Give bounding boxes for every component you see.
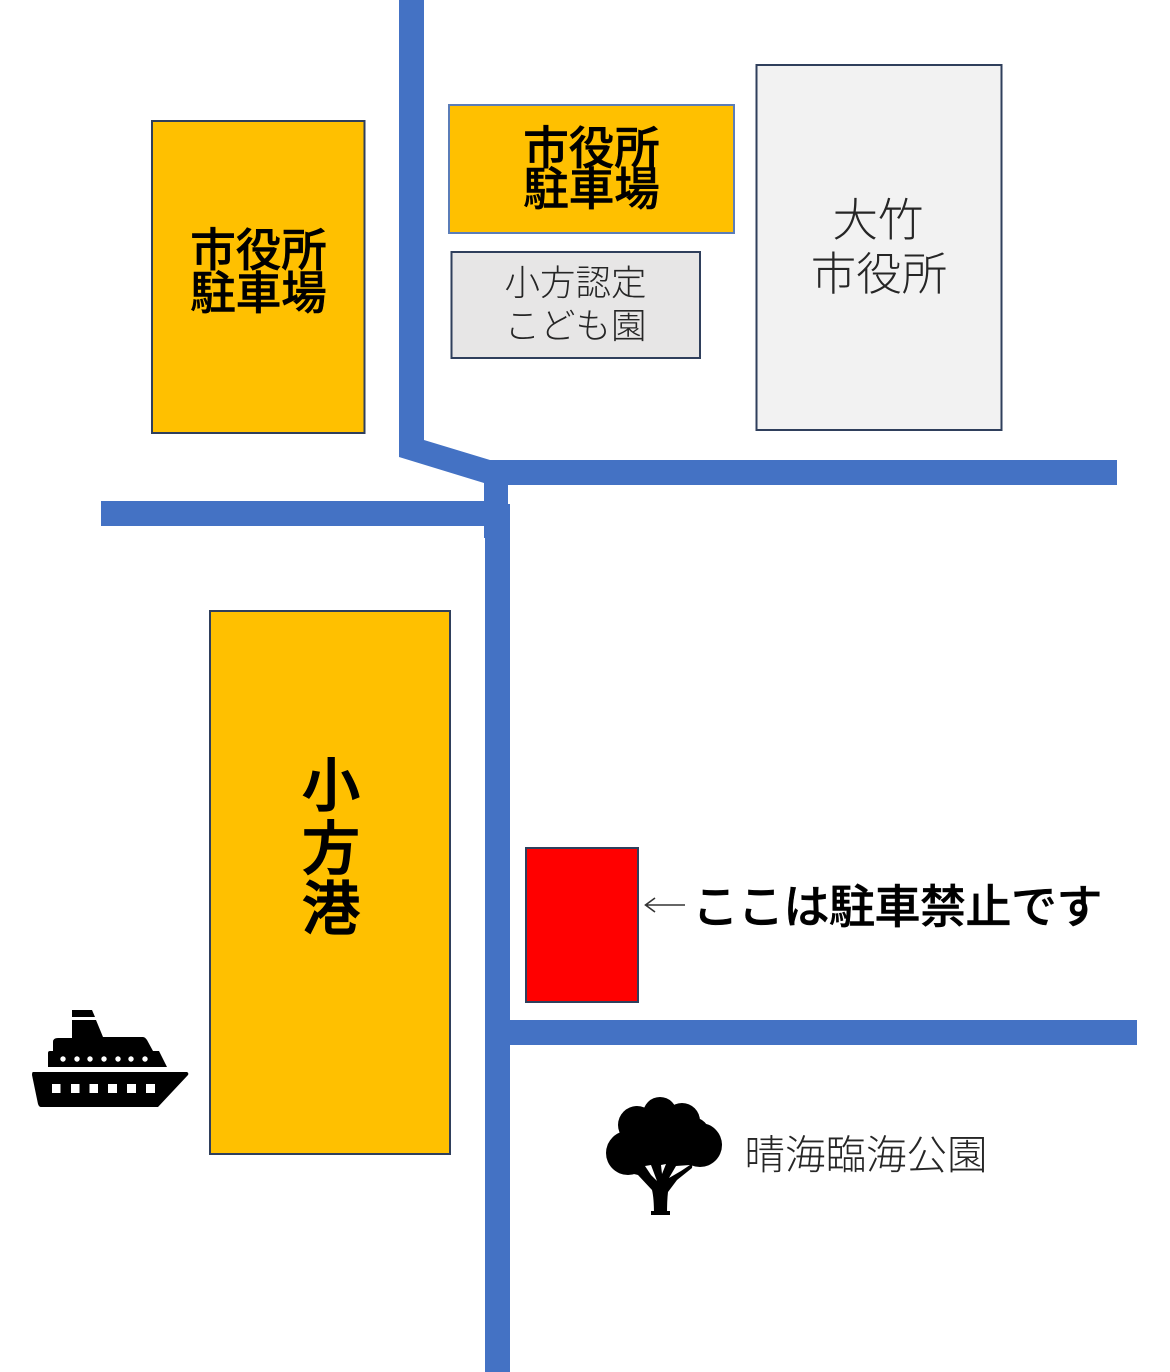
icon: tree [606,1097,722,1215]
panel: city hall parking top: 駐車場 [523,164,660,215]
panel: city hall parking left: 駐車場 [190,268,327,319]
panel: Ogata port: 小 [302,754,360,819]
panel: city hall parking top [449,105,734,233]
panel: Otake city hall [756,65,1002,430]
panel: Otake city hall: 市役所 [811,249,947,300]
panel: Otake city hall: 大竹 [832,195,924,246]
no parking area [526,848,638,1002]
panel: city hall parking top: 市役所 [523,123,660,174]
panel: Ogata port [210,611,450,1154]
panel: Ogata certified kindergarten [452,252,700,358]
panel: Ogata certified kindergarten: 小方認定 [504,263,647,303]
panel: Ogata port: 港 [302,877,360,942]
panel: Ogata port: 方 [302,817,360,882]
label: Seikai Rinkai park: 晴海臨海公園 [744,1132,988,1178]
panel: Ogata certified kindergarten: こども園 [504,306,647,346]
callout: no parking here: ここは駐車禁止です [692,881,1102,933]
panel: city hall parking left [152,121,364,433]
icon: ship [32,1010,188,1107]
panel: city hall parking left: 市役所 [190,225,327,276]
